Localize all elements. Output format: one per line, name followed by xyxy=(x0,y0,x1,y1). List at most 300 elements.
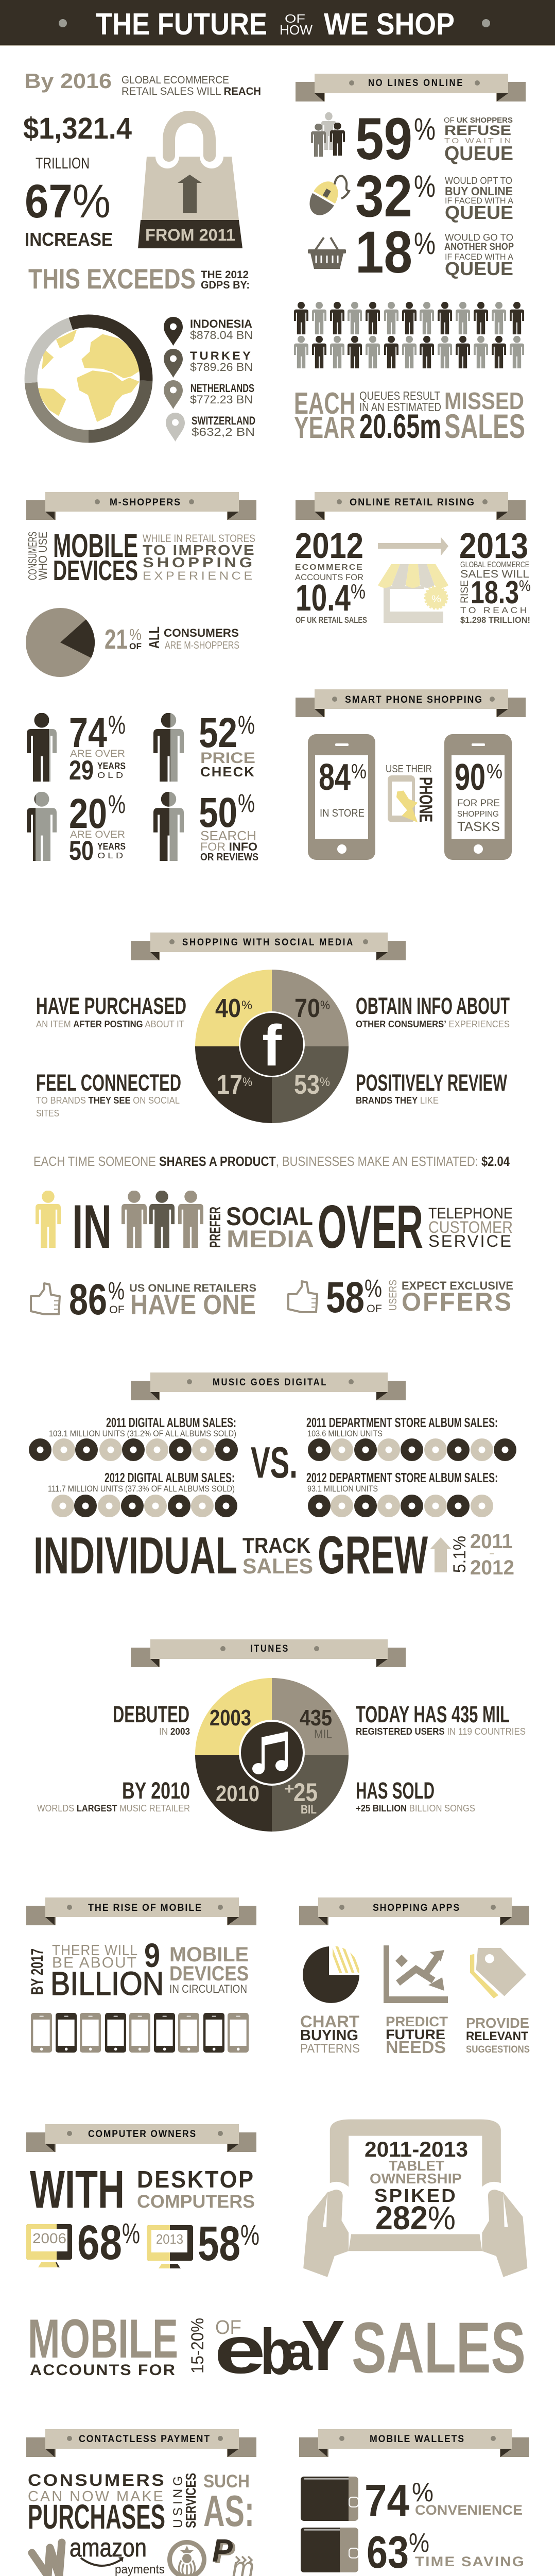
logo: starbucks xyxy=(167,2540,206,2576)
text: prefer social media over telephone: PREFER xyxy=(207,1207,224,1248)
stat: 50 percent search for info: SEARCH xyxy=(200,828,256,843)
text: feel connected: FEEL CONNECTED xyxy=(36,1070,181,1096)
stat: 2006 monitor 68 percent: % xyxy=(122,2217,140,2249)
text: has sold: +25 BILLION BILLION SONGS xyxy=(356,1803,475,1814)
stat: 1321.4 trillion: TRILLION xyxy=(36,154,90,172)
stat: 59 percent refuse xyxy=(355,106,513,172)
text: mobile accounts for: ACCOUNTS FOR xyxy=(30,2362,176,2379)
text: prefer social media over telephone: OVER xyxy=(318,1193,423,1261)
stat: wallet 74 percent convenience: % xyxy=(412,2478,433,2507)
text: tablet ownership spiked xyxy=(365,2137,468,2236)
logo: paypal: P xyxy=(212,2533,233,2569)
stat: 21 percent of all consumers: OF xyxy=(129,641,142,651)
text: chart buying patterns: CHART xyxy=(300,2012,359,2031)
stat: 2006 monitor 68 percent xyxy=(26,2215,140,2270)
stat: missed sales each year: SALES xyxy=(444,407,525,445)
text: 2012 department store album sales xyxy=(306,1470,498,1494)
chart: itunes quadrant pie xyxy=(195,1678,349,1832)
text: feel connected: TO BRANDS THEY SEE ON SOCIAL xyxy=(36,1095,180,1106)
icon: phone 90 percent pre shopping: 90 xyxy=(455,757,485,798)
ribbon: mobile wallets xyxy=(299,2429,529,2457)
icon: phone 84 percent in store xyxy=(308,734,375,860)
pictogram: one in three people: IN xyxy=(72,1192,112,1261)
text: debuted in 2003: DEBUTED xyxy=(113,1701,189,1727)
icon: phone 84 percent in store: % xyxy=(351,760,367,783)
legend: gdp by country: NETHERLANDS xyxy=(190,382,254,395)
text: consumers use mobile devices: DEVICES xyxy=(53,554,138,586)
stat: missed sales each year: 20.65m xyxy=(359,407,441,445)
stat: 21 percent of all consumers: ALL xyxy=(146,626,163,649)
heading: by 2016: By 2016 xyxy=(24,69,112,93)
text: have purchased: HAVE PURCHASED xyxy=(36,993,186,1019)
stat: 2013 global ecommerce rise: 18.3 xyxy=(471,575,519,611)
ribbon: shopping with social media xyxy=(131,933,406,960)
chart: facebook quadrant pie: 70 xyxy=(294,993,320,1023)
chart: facebook quadrant pie: 17 xyxy=(217,1070,242,1100)
icon: shopping bag with arrow xyxy=(138,117,242,248)
stat: 20 percent over 50 xyxy=(27,790,126,866)
panel: smart phone shopping xyxy=(296,689,526,860)
text: 2012 digital album sales xyxy=(48,1470,235,1494)
stat: 86 percent of us online retailers: 86 xyxy=(69,1275,107,1324)
legend: gdp by country: $632,2 BN xyxy=(192,426,255,438)
stat: 2013 global ecommerce rise xyxy=(459,526,531,625)
icon: trend chart xyxy=(384,1945,448,2003)
chart: facebook quadrant pie: % xyxy=(242,1075,252,1089)
title banner: THE FUTURE xyxy=(96,7,267,41)
stat: 59 percent refuse: REFUSE xyxy=(444,123,511,138)
stat: wallet 74 percent convenience: CONVENIENCE xyxy=(415,2502,523,2518)
ribbon: mobile wallets: MOBILE WALLETS xyxy=(370,2434,465,2445)
heading: this exceeds: THIS EXCEEDS xyxy=(28,263,196,295)
stat: 2012 ecommerce share: ECOMMERCE xyxy=(295,563,363,572)
stat: 9 billion mobile devices: IN CIRCULATION xyxy=(169,1982,247,1995)
stat: 86 percent of us online retailers xyxy=(31,1275,256,1324)
text: tablet ownership spiked: TABLET xyxy=(389,2158,444,2174)
panel: itunes xyxy=(37,1639,526,1832)
logo: ebay wordmark: b xyxy=(260,2316,293,2388)
legend: gdp by country xyxy=(164,317,255,442)
stat: individual track sales grew: - xyxy=(489,1546,495,1560)
stat: 2013 global ecommerce rise: 2013 xyxy=(459,526,528,566)
ribbon: shopping with social media: SHOPPING WITH SOCIAL MEDIA xyxy=(182,937,354,948)
stat: 9 billion mobile devices: 9 xyxy=(144,1936,160,1974)
stat: 74 percent over 29: 74 xyxy=(69,709,107,756)
stat: 2006 monitor 68 percent: 2006 xyxy=(32,2230,66,2246)
stat: missed sales each year: MISSED xyxy=(444,387,524,414)
stat: 74 percent over 29: ARE OVER xyxy=(70,749,125,759)
legend: gdp by country: INDONESIA xyxy=(190,317,252,330)
text: global ecommerce reach: GLOBAL ECOMMERCE xyxy=(122,74,229,86)
stat: 59 percent refuse: QUEUE xyxy=(444,143,513,165)
icon: price tag xyxy=(470,1948,526,1998)
stat: 2012 ecommerce share: OF UK RETAIL SALES xyxy=(296,615,367,625)
chart: facebook quadrant pie: % xyxy=(320,1075,330,1089)
stat: 2013 global ecommerce rise: SALES WILL xyxy=(460,568,529,580)
icon: phone 84 percent in store: IN STORE xyxy=(320,807,365,819)
text: consumers can now make purchases: SERVICES xyxy=(183,2473,199,2528)
chart: itunes quadrant pie: BIL xyxy=(301,1803,317,1817)
panel: shopping with social media xyxy=(31,933,513,1324)
stat: 59 percent refuse: 59 xyxy=(355,106,412,172)
pictogram: row of phones xyxy=(31,2013,249,2053)
stat: 50 percent search for info: FOR INFO xyxy=(200,840,257,853)
stat: 32 percent buy online: QUEUE xyxy=(445,202,513,223)
stat: 9 billion mobile devices: BILLION xyxy=(50,1965,164,2002)
ribbon: itunes xyxy=(131,1639,406,1667)
logo: ebay wordmark: Y xyxy=(301,2306,345,2385)
stat: 58 percent of users expect offers: EXPECT EXCLUSIVE xyxy=(402,1279,513,1292)
stat: 18 percent another shop: ANOTHER SHOP xyxy=(444,242,514,252)
text: 2012 department store album sales: 93.1 MILLION UNITS xyxy=(307,1484,378,1494)
stat: 58 percent of users expect offers: OFFERS xyxy=(402,1287,513,1316)
text: provide relevant suggestions: SUGGESTIONS xyxy=(466,2044,530,2055)
text: prefer social media over telephone: CUSTOMER xyxy=(428,1218,513,1236)
stat: 18 percent another shop: WOULD GO TO xyxy=(445,232,513,243)
stat: missed sales each year xyxy=(294,386,525,445)
ribbon: shopping apps: SHOPPING APPS xyxy=(373,1903,460,1913)
text: positively review: BRANDS THEY LIKE xyxy=(356,1095,439,1106)
text: consumers can now make purchases: CONSUMERS xyxy=(28,2471,166,2489)
text: 2011 department store album sales: 103.6 MILLION UNITS xyxy=(307,1429,383,1438)
text: positively review xyxy=(356,1070,507,1106)
text: consumers use mobile devices: CONSUMERS xyxy=(26,532,39,580)
icon: use their phone: PHONE xyxy=(415,777,436,822)
stat: wallet 63 percent time saving: TIME SAVING xyxy=(415,2554,525,2569)
pictogram: one in three people xyxy=(36,1191,203,1261)
ribbon: no lines online xyxy=(296,74,526,101)
stat: 32 percent buy online: BUY ONLINE xyxy=(445,184,513,198)
title banner: OF xyxy=(285,12,305,25)
text: mobile accounts for: OF xyxy=(215,2317,241,2338)
text: tablet ownership spiked: SPIKED xyxy=(374,2185,457,2206)
stat: 2013 global ecommerce rise: GLOBAL ECOMMERCE xyxy=(460,561,529,569)
stat: 52 percent price check: CHECK xyxy=(200,764,255,779)
chart: itunes quadrant pie: 2003 xyxy=(210,1705,251,1731)
title banner xyxy=(0,0,555,46)
text: 2012 digital album sales: 111.7 MILLION UNITS (37.3% OF ALL ALBUMS SOLD) xyxy=(48,1484,235,1494)
legend: gdp by country: TURKEY xyxy=(190,349,253,362)
legend: gdp by country: $789.26 BN xyxy=(190,361,253,374)
ribbon: the rise of mobile xyxy=(26,1897,256,1925)
icon: pie chart with stripes xyxy=(303,1946,359,2003)
logo: google wallet mark xyxy=(32,2543,62,2576)
stat: 58 percent of users expect offers: % xyxy=(365,1275,382,1302)
text: has sold: HAS SOLD xyxy=(356,1777,435,1804)
stat: 52 percent price check: 52 xyxy=(199,709,237,756)
icon: music note xyxy=(252,1732,288,1774)
stat: individual track sales grew: 2012 xyxy=(470,1556,514,1579)
icon: use their phone: USE THEIR xyxy=(386,764,432,775)
stat: 21 percent of all consumers xyxy=(105,624,239,655)
heading: with desktop computers: DESKTOP xyxy=(137,2166,255,2193)
stat: 2013 global ecommerce rise: TO REACH xyxy=(460,605,529,615)
stat: 18 percent another shop: % xyxy=(414,226,436,261)
stat: 74 percent over 29: 29 xyxy=(69,755,94,786)
stat: 52 percent price check: % xyxy=(238,710,255,739)
text: chart buying patterns xyxy=(300,2012,360,2056)
logo: ebay wordmark: a xyxy=(284,2321,314,2382)
panel: computer owners xyxy=(26,2124,259,2271)
stat: missed sales each year: YEAR xyxy=(294,411,355,445)
stat: 86 percent of us online retailers: US ONLINE RETAILERS xyxy=(129,1282,256,1294)
stat: 32 percent buy online: 32 xyxy=(355,163,412,229)
text: obtain info about: OTHER CONSUMERS’ EXPERIENCES xyxy=(356,1019,510,1029)
chart: globe ring xyxy=(31,321,146,436)
stat: 9 billion mobile devices: DEVICES xyxy=(169,1962,249,1985)
icon: shopping bag with arrow: FROM 2011 xyxy=(145,226,235,244)
chart: facebook quadrant pie: % xyxy=(320,998,330,1012)
stat: 21 percent of all consumers: % xyxy=(129,625,142,643)
ribbon: m-shoppers: M-SHOPPERS xyxy=(110,497,181,508)
logo: ebay wordmark: e xyxy=(214,2312,266,2387)
text: each share earns: EACH TIME SOMEONE SHARES A PRODUCT, BUSINESSES MAKE AN ESTIMATED: $2.04 xyxy=(33,1154,510,1169)
stat: wallet 63 percent time saving xyxy=(301,2527,525,2576)
stat: missed sales each year: IN AN ESTIMATED xyxy=(359,400,441,414)
stat: 67 percent increase: 67% xyxy=(25,175,111,228)
stat: 21 percent of all consumers: ARE M-SHOPPERS xyxy=(165,640,239,651)
stat: 2012 ecommerce share: 10.4 xyxy=(296,578,351,619)
icon: shopping basket xyxy=(308,238,346,269)
text: predict future needs: NEEDS xyxy=(386,2038,446,2057)
text: debuted in 2003: IN 2003 xyxy=(159,1726,190,1737)
stat: individual track sales grew: 2011 xyxy=(470,1530,513,1553)
stat: 20 percent over 50: YEARS xyxy=(97,841,126,852)
stat: missed sales each year: EACH xyxy=(294,386,355,420)
stat: 18 percent another shop: QUEUE xyxy=(445,258,513,279)
text: consumers use mobile devices: TO IMPROVE xyxy=(143,542,255,558)
text: consumers use mobile devices: MOBILE xyxy=(53,527,138,564)
stat: 2012 ecommerce share: % xyxy=(351,581,366,603)
ribbon: the rise of mobile: THE RISE OF MOBILE xyxy=(88,1903,202,1913)
stat: 2013 global ecommerce rise: $1.298 TRILLION! xyxy=(460,615,530,625)
text: consumers can now make purchases: SUCH xyxy=(203,2471,250,2492)
stat: 2013 monitor 58 percent: 2013 xyxy=(156,2231,183,2247)
text: feel connected xyxy=(36,1070,181,1118)
text: obtain info about xyxy=(356,993,510,1029)
text: by 2010: WORLDS LARGEST MUSIC RETAILER xyxy=(37,1803,190,1814)
text: consumers use mobile devices: EXPERIENCE xyxy=(143,569,255,582)
stat: 20 percent over 50: OLD xyxy=(97,852,126,860)
text: feel connected: SITES xyxy=(36,1108,59,1118)
stat: 52 percent price check xyxy=(153,709,255,782)
heading: this exceeds: GDPS BY: xyxy=(201,279,250,291)
ribbon: contactless payment: CONTACTLESS PAYMENT xyxy=(79,2434,211,2445)
ribbon: m-shoppers xyxy=(26,492,256,520)
stat: 32 percent buy online: % xyxy=(414,169,436,204)
chart: itunes quadrant pie: 435 xyxy=(300,1705,332,1731)
text: prefer social media over telephone xyxy=(207,1193,513,1261)
text: debuted in 2003 xyxy=(113,1701,190,1737)
stat: 18 percent another shop xyxy=(355,219,514,285)
text: today has 435 mil xyxy=(356,1701,526,1737)
stat: 86 percent of us online retailers: HAVE ONE xyxy=(130,1289,256,1320)
stat: 2006 monitor 68 percent: 68 xyxy=(77,2215,122,2270)
icon: shop front with percent seal: % xyxy=(431,594,441,605)
pictogram: two rows of people xyxy=(294,302,524,368)
text: consumers use mobile devices: WHILE IN RETAIL STORES xyxy=(143,533,255,545)
stat: 18 percent another shop: 18 xyxy=(355,219,412,285)
ribbon: music goes digital: MUSIC GOES DIGITAL xyxy=(213,1377,327,1388)
text: prefer social media over telephone: SOCIAL xyxy=(226,1202,313,1231)
stat: missed sales each year: QUEUES RESULT xyxy=(359,389,440,402)
stat: 20 percent over 50: ARE OVER xyxy=(70,829,125,840)
stat: wallet 74 percent convenience xyxy=(301,2475,523,2526)
text: have purchased xyxy=(36,993,186,1029)
heading: this exceeds: THE 2012 xyxy=(201,269,249,281)
title banner: HOW xyxy=(280,22,313,38)
chart: facebook quadrant pie: 40 xyxy=(215,993,241,1023)
logo: amazon payments xyxy=(70,2533,165,2576)
stat: 20 percent over 50: 50 xyxy=(69,836,94,866)
icon: queue of people xyxy=(311,112,345,157)
stat: 20 percent over 50: % xyxy=(108,790,126,819)
text: global ecommerce reach xyxy=(122,74,261,97)
arrow: 2012 to 2013 xyxy=(378,537,448,556)
pictogram: 2012 department store discs xyxy=(308,1495,493,1517)
stat: wallet 63 percent time saving: % xyxy=(409,2528,429,2558)
text: 2011 digital album sales: 103.1 MILLION UNITS (31.2% OF ALL ALBUMS SOLD) xyxy=(49,1429,236,1438)
logo: ebay wordmark xyxy=(214,2306,345,2388)
text: consumers can now make purchases xyxy=(28,2471,254,2536)
text: consumers can now make purchases: AS: xyxy=(203,2487,254,2536)
chart: itunes quadrant pie: MIL xyxy=(314,1727,332,1741)
pictogram: 2011 digital discs xyxy=(29,1438,238,1461)
text: have purchased: AN ITEM AFTER POSTING ABOUT IT xyxy=(36,1019,184,1029)
panel: shopping apps xyxy=(299,1897,530,2057)
ribbon: no lines online: NO LINES ONLINE xyxy=(368,78,464,89)
panel: mobile share of ebay sales xyxy=(28,2306,526,2388)
stat: 2012 ecommerce share: 2012 xyxy=(295,526,363,566)
stat: 74 percent over 29: YEARS xyxy=(97,761,126,771)
heading: with desktop computers xyxy=(30,2160,255,2219)
text: mobile accounts for: 15-20% xyxy=(188,2318,207,2374)
icon: phone 90 percent pre shopping: SHOPPING xyxy=(457,810,499,819)
stat: 32 percent buy online xyxy=(355,163,514,229)
icon: use their phone xyxy=(386,764,436,822)
text: provide relevant suggestions: RELEVANT xyxy=(466,2029,528,2043)
panel: music goes digital xyxy=(29,1372,516,1585)
stat: 50 percent search for info: OR REVIEWS xyxy=(200,852,258,863)
stat: 50 percent search for info xyxy=(153,789,258,863)
stat: 74 percent over 29: OLD xyxy=(97,771,126,780)
stat: 86 percent of us online retailers: % xyxy=(108,1278,125,1305)
stat: 50 percent search for info: 50 xyxy=(199,789,237,836)
stat: 9 billion mobile devices xyxy=(28,1936,249,2002)
panel: no lines online xyxy=(294,74,526,445)
stat: individual track sales grew: SALES xyxy=(242,1554,313,1578)
ribbon: contactless payment xyxy=(26,2429,256,2457)
stat: 32 percent buy online: WOULD OPT TO xyxy=(445,176,512,187)
text: consumers can now make purchases: PURCHASES xyxy=(28,2498,165,2536)
stat: 1321.4 trillion: $1,321.4 xyxy=(23,112,132,145)
icon: shop front with percent seal xyxy=(378,564,448,623)
stat: 32 percent buy online: IF FACED WITH A xyxy=(445,196,514,206)
ribbon: online retail rising: ONLINE RETAIL RISING xyxy=(350,497,475,508)
text: 2012 digital album sales: 2012 DIGITAL ALBUM SALES: xyxy=(105,1470,235,1485)
stat: 58 percent of users expect offers: 58 xyxy=(326,1273,365,1321)
stat: 20 percent over 50: 20 xyxy=(69,790,107,837)
text: chart buying patterns: PATTERNS xyxy=(300,2042,360,2056)
stat: 2012 ecommerce share xyxy=(295,526,367,625)
text: mobile accounts for: MOBILE xyxy=(28,2308,178,2369)
heading: with desktop computers: COMPUTERS xyxy=(137,2192,255,2212)
stat: 2013 monitor 58 percent: % xyxy=(240,2218,259,2251)
text: prefer social media over telephone: MEDIA xyxy=(227,1225,314,1252)
text: consumers can now make purchases: CAN NOW MAKE xyxy=(28,2488,165,2505)
text: consumers use mobile devices: SHOPPING xyxy=(143,554,255,570)
text: prefer social media over telephone: TELEPHONE xyxy=(428,1205,513,1222)
text: by 2010 xyxy=(37,1777,190,1814)
ribbon: online retail rising xyxy=(296,492,526,520)
stat: 21 percent of all consumers: 21 xyxy=(105,624,128,655)
panel: mobile wallets xyxy=(299,2429,529,2576)
stat: 2013 global ecommerce rise: % xyxy=(519,578,531,595)
stat: 74 percent over 29: % xyxy=(108,710,126,739)
text: chart buying patterns: BUYING xyxy=(300,2027,358,2044)
stat: 58 percent of users expect offers xyxy=(288,1273,513,1321)
ribbon: itunes: ITUNES xyxy=(250,1643,289,1654)
logo: paypal: P xyxy=(215,2535,236,2570)
stat: 59 percent refuse: TO WAIT IN xyxy=(444,137,513,145)
ribbon: smart phone shopping xyxy=(296,689,526,717)
panel: tablet ownership xyxy=(303,2120,527,2277)
text: 2011 department store album sales xyxy=(306,1415,498,1438)
text: consumers can now make purchases: USING xyxy=(171,2473,185,2528)
stat: 9 billion mobile devices: BE ABOUT xyxy=(52,1955,137,1971)
chart: facebook quadrant pie: % xyxy=(241,998,252,1012)
text: 2011 digital album sales: 2011 DIGITAL ALBUM SALES: xyxy=(106,1415,236,1430)
text: consumers use mobile devices: WHO USE xyxy=(36,532,49,580)
text: tablet ownership spiked: 282% xyxy=(375,2199,456,2236)
chart: itunes quadrant pie: + xyxy=(284,1781,294,1798)
title banner: WE SHOP xyxy=(324,7,455,41)
stat: 67 percent increase: INCREASE xyxy=(25,229,113,250)
panel: online retail rising xyxy=(295,492,531,625)
stat: wallet 74 percent convenience: 74 xyxy=(365,2475,409,2526)
stat: 21 percent of all consumers: CONSUMERS xyxy=(164,626,239,639)
ribbon: shopping apps xyxy=(299,1897,529,1925)
text: by 2010: BY 2010 xyxy=(122,1777,190,1804)
stat: 9 billion mobile devices: THERE WILL xyxy=(52,1942,138,1959)
stat: 58 percent of users expect offers: USERS xyxy=(387,1280,399,1311)
legend: gdp by country: $878.04 BN xyxy=(190,329,253,342)
text: tablet ownership spiked: OWNERSHIP xyxy=(370,2171,462,2187)
text: provide relevant suggestions: PROVIDE xyxy=(466,2015,529,2031)
stat: individual track sales grew: TRACK xyxy=(242,1533,310,1557)
chart: 21 percent pie xyxy=(26,608,95,677)
icon: computer mouse xyxy=(304,176,349,220)
panel: m-shoppers xyxy=(26,492,258,866)
text: predict future needs: PREDICT xyxy=(386,2014,448,2029)
icon: phone 90 percent pre shopping: TASKS xyxy=(457,819,500,834)
stat: individual track sales grew: 5.1% xyxy=(450,1536,470,1573)
stat: individual track sales grew: INDIVIDUAL xyxy=(33,1527,237,1585)
ribbon: computer owners: COMPUTER OWNERS xyxy=(88,2129,197,2140)
stat: 2013 global ecommerce rise: RISE xyxy=(459,580,471,603)
chart: itunes quadrant pie: 25 xyxy=(293,1778,318,1807)
stat: 59 percent refuse: OF UK SHOPPERS xyxy=(444,116,513,125)
stat: 52 percent price check: PRICE xyxy=(200,750,255,767)
stat: 2012 ecommerce share: ACCOUNTS FOR xyxy=(295,572,363,582)
stat: 1321.4 trillion xyxy=(23,112,132,172)
panel: contactless payment xyxy=(26,2429,256,2576)
stat: individual track sales grew xyxy=(33,1526,514,1585)
label: versus: VS. xyxy=(251,1438,298,1487)
ribbon: computer owners xyxy=(26,2124,256,2152)
chart: facebook quadrant pie: 53 xyxy=(294,1070,320,1100)
text: today has 435 mil: REGISTERED USERS IN 119 COUNTRIES xyxy=(356,1726,526,1737)
